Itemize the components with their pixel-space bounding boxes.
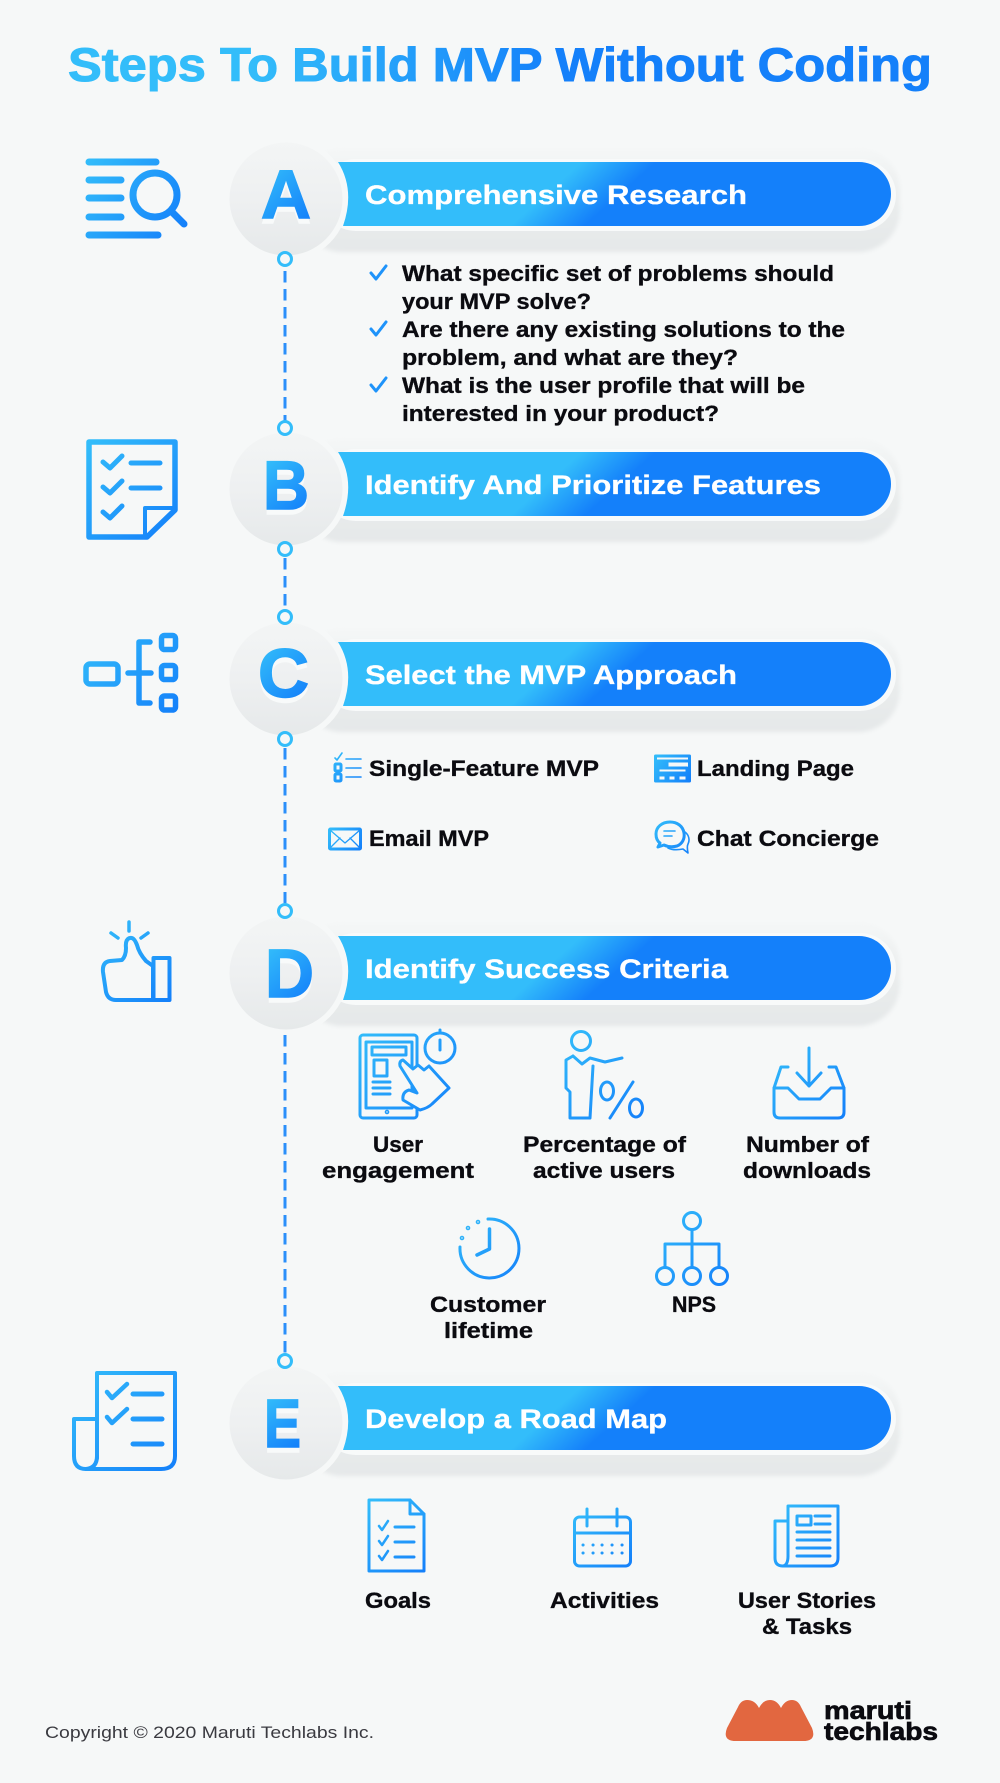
icon: check: [371, 322, 386, 335]
item: User engagement: [322, 1030, 475, 1183]
label: Customer: [430, 1292, 546, 1317]
icon: newspaper: [775, 1506, 838, 1566]
panel: step C header: [224, 617, 900, 741]
step letter B: B: [263, 452, 309, 529]
icon: research magnifier: [89, 162, 184, 235]
copyright: Copyright © 2020 Maruti Techlabs Inc.: [45, 1723, 374, 1742]
step letter D: D: [265, 935, 314, 1012]
icon: chat bubbles: [656, 822, 689, 853]
item: Customer lifetime: [430, 1219, 546, 1343]
label: [743, 1132, 871, 1183]
label: [322, 1132, 475, 1183]
label: lifetime: [444, 1318, 533, 1343]
title: Steps To Build MVP Without Coding: [68, 38, 932, 91]
question 2: Are there any existing solutions to the: [402, 317, 845, 342]
heading: Identify Success Criteria: Identify Success Criteria: [365, 954, 729, 984]
step letter E: E: [264, 1390, 301, 1467]
item: Goals: [365, 1500, 431, 1613]
icon: calendar: [574, 1509, 630, 1566]
panel: step A header: [224, 137, 900, 261]
logo wordmark: maruti: [824, 1697, 912, 1725]
label: active users: [533, 1158, 675, 1183]
panel: step D header: [224, 911, 900, 1035]
step letter E: E: [264, 1385, 301, 1462]
icon: sticky-note checklist: [89, 442, 175, 537]
option: Chat Concierge: [656, 822, 879, 853]
icon: document checklist: [369, 1500, 424, 1571]
option: Email MVP: [330, 826, 489, 851]
question 2: problem, and what are they?: [402, 345, 738, 370]
label: & Tasks: [762, 1614, 852, 1639]
option: Single-Feature MVP: [335, 753, 599, 781]
label: User Stories: [738, 1588, 876, 1613]
question 1: [402, 261, 834, 314]
checklist: research questions: [371, 261, 845, 426]
logo: Maruti Techlabs: [726, 1697, 938, 1746]
question 1: your MVP solve?: [402, 289, 591, 314]
logo wordmark: techlabs: [824, 1718, 938, 1746]
heading: Select the MVP Approach: Select the MVP Approach: [365, 660, 737, 690]
label: User: [373, 1132, 423, 1157]
label: Goals: [365, 1588, 431, 1613]
label: Single-Feature MVP: [369, 756, 599, 781]
step letter A: A: [261, 161, 311, 238]
item: User Stories & Tasks: [738, 1506, 876, 1639]
connector: D to E: [278, 1035, 292, 1368]
label: NPS: [672, 1292, 716, 1317]
label: Email MVP: [369, 826, 489, 851]
icon: tablet, hand and stopwatch: [360, 1030, 455, 1118]
icon: hierarchy tree: [86, 636, 176, 710]
icon: check: [371, 378, 386, 391]
label: [523, 1132, 687, 1183]
icon: road map scroll: [74, 1373, 175, 1469]
option: Landing Page: [656, 756, 854, 781]
question 2: [402, 317, 845, 370]
question 3: interested in your product?: [402, 401, 719, 426]
heading: Comprehensive Research: Comprehensive Research: [365, 180, 747, 210]
item: NPS: [656, 1212, 728, 1317]
heading: Identify And Prioritize Features: Identify And Prioritize Features: [365, 470, 821, 500]
label: engagement: [322, 1158, 475, 1183]
connector: B to C: [278, 542, 292, 624]
panel: step E header: [224, 1361, 900, 1485]
icon: person with percent: [566, 1032, 642, 1118]
item: Percentage of active users: [523, 1032, 687, 1183]
connector: A to B: [278, 252, 292, 434]
label: Activities: [550, 1588, 659, 1613]
label: Percentage of: [523, 1132, 687, 1157]
heading: Develop a Road Map: Develop a Road Map: [365, 1404, 667, 1434]
logo wordmark: [824, 1697, 938, 1746]
item: Number of downloads: [743, 1048, 871, 1183]
step letter C: C: [258, 640, 309, 717]
step letter A: A: [261, 156, 311, 233]
step letter C: C: [258, 635, 309, 712]
label: [430, 1292, 546, 1343]
question 3: [402, 373, 805, 426]
icon: envelope: [330, 829, 360, 849]
question 3: What is the user profile that will be: [402, 373, 805, 398]
logo mark: [726, 1700, 813, 1741]
step letter D: D: [265, 940, 314, 1017]
label: Landing Page: [697, 756, 854, 781]
icon: clock: [460, 1219, 519, 1278]
icon: org tree: [656, 1212, 728, 1284]
icon: thumbs up: [103, 922, 170, 1000]
icon: inbox download: [774, 1048, 844, 1118]
step letter B: B: [263, 447, 309, 524]
panel: step B header: [224, 427, 900, 551]
question 1: What specific set of problems should: [402, 261, 834, 286]
label: Chat Concierge: [697, 826, 879, 851]
label: [738, 1588, 876, 1639]
label: Number of: [746, 1132, 870, 1157]
icon: web page layout: [656, 756, 690, 781]
icon: check: [371, 266, 386, 279]
connector: C to D: [278, 732, 292, 918]
item: Activities: [550, 1509, 659, 1613]
icon: list with checks: [335, 753, 361, 781]
label: downloads: [743, 1158, 871, 1183]
